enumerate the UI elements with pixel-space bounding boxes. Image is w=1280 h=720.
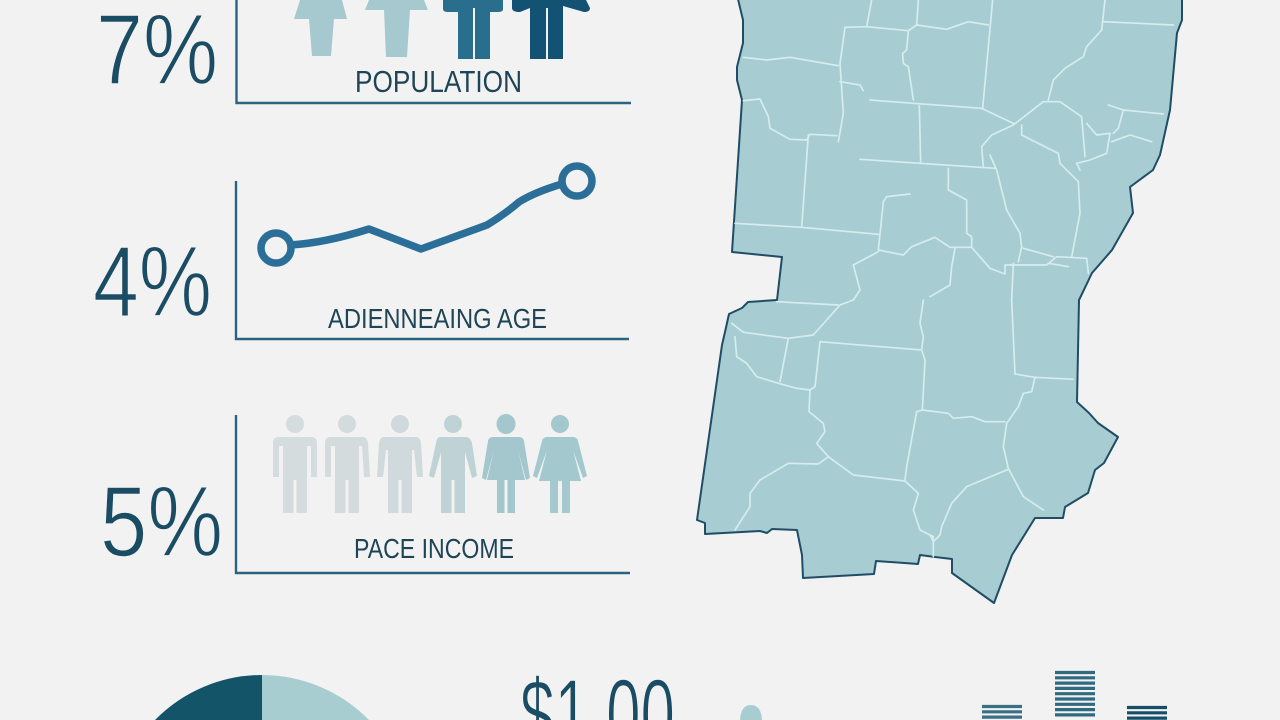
panel axes: age [236,181,629,339]
pie slice: light [262,675,369,720]
map outline [697,0,1182,603]
line chart: age trend [261,166,592,263]
label: income: PACE INCOME [354,533,514,564]
bar 2 [1055,672,1095,715]
icon: person head [740,705,762,720]
label: age: ADIENNEAING AGE [328,303,547,334]
stat: 5%: 5% [100,466,223,578]
label: population: POPULATION [355,64,522,99]
county borders, south [732,300,1073,557]
panel: population [96,0,631,106]
county borders, north [735,0,1173,300]
icon: people row, population [294,0,590,59]
pie chart [155,675,369,720]
panel: income [100,414,630,578]
panel axes: income [236,415,630,573]
panel axes: population [236,0,631,103]
stat: 4%: 4% [93,226,212,338]
pie slice: dark [155,675,262,720]
bar 3 [1127,708,1167,718]
panel: age [93,166,629,339]
icon: people row, income [273,414,587,513]
bar 1 [982,706,1022,717]
bar chart: striped bars [982,672,1167,718]
map: region with county borders [697,0,1182,603]
